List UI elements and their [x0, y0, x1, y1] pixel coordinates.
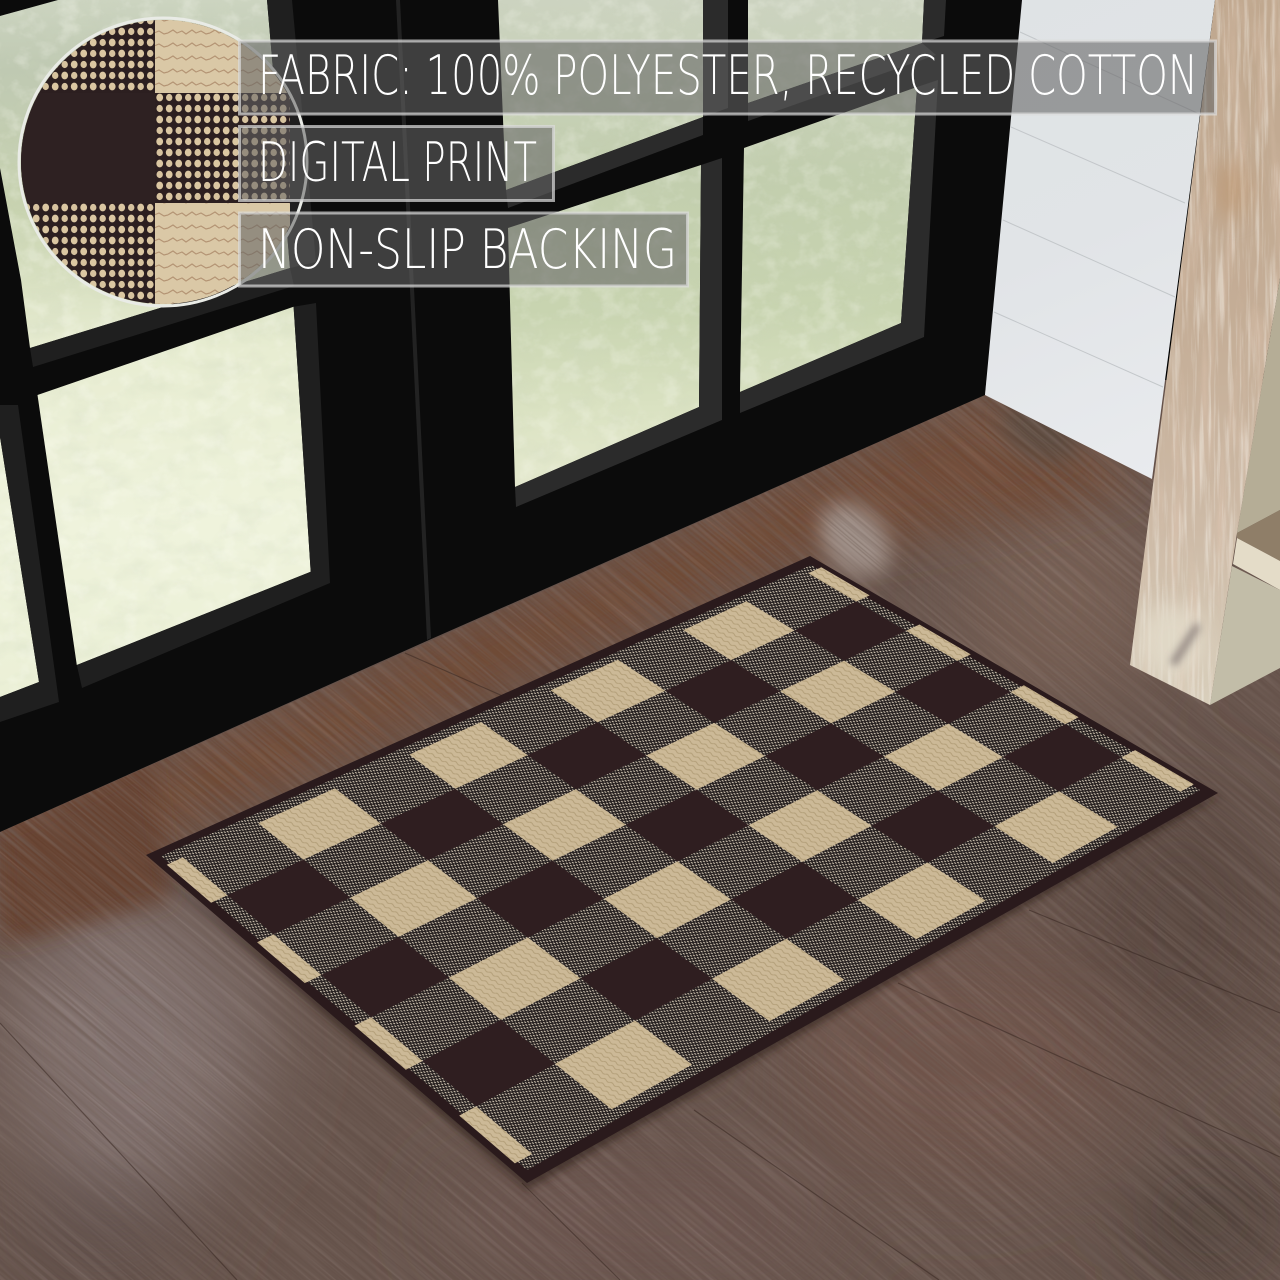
solid dark squares	[227, 602, 1122, 1106]
window panes showing the lawn	[0, 0, 930, 700]
swatch dark cell	[18, 93, 155, 203]
tan squares	[258, 601, 1118, 1109]
left door frame bevels	[0, 0, 330, 722]
post crossbar	[1233, 538, 1280, 590]
rug binding	[146, 556, 1218, 1183]
black french doors	[0, 0, 1022, 832]
door seam	[396, 0, 431, 640]
label: digital print: DIGITAL PRINT	[258, 131, 537, 194]
wooden post	[1120, 0, 1280, 710]
swatch tan cell bottom	[155, 203, 290, 308]
door mat rug	[146, 556, 1222, 1190]
rug woven field	[161, 565, 1200, 1170]
swatch woven cells	[18, 18, 290, 308]
right door frame bevels	[506, 0, 946, 507]
swatch tan cell top	[155, 18, 290, 93]
label: non-slip backing: NON-SLIP BACKING	[258, 218, 677, 281]
post side face upper	[1237, 278, 1280, 533]
wood floor	[0, 380, 1280, 1280]
post ledge shadow	[1237, 510, 1280, 561]
post front face	[1120, 0, 1280, 710]
label: digital print	[240, 126, 554, 200]
magnified fabric swatch circle	[18, 18, 307, 308]
tan edge slivers	[167, 567, 1194, 1163]
post side face lower	[1210, 566, 1280, 705]
shiplap wall	[985, 0, 1215, 479]
